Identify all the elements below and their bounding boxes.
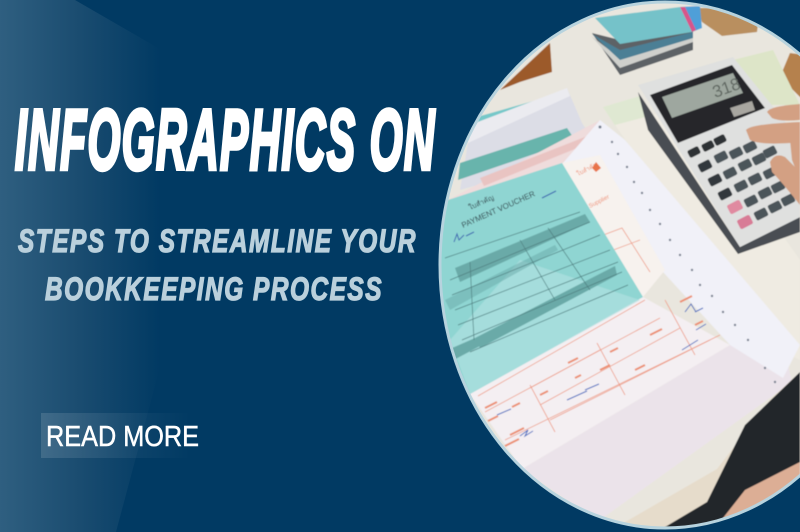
voucher shaded bands	[443, 214, 617, 362]
voucher heading: PAYMENT VOUCHER	[460, 189, 537, 230]
solar cell	[730, 101, 755, 117]
beige table piece	[626, 387, 784, 526]
subtitle line 2: BOOKKEEPING PROCESS	[45, 271, 383, 307]
form top labels	[576, 164, 609, 208]
form red labels	[485, 296, 703, 446]
voucher heading: ใบสำคัญ	[467, 193, 495, 212]
notebook page under papers	[616, 119, 640, 127]
pink-white form	[470, 297, 730, 468]
form handwriting	[497, 304, 706, 436]
button background	[41, 413, 191, 458]
teal sheet two	[458, 128, 575, 180]
grey sheet	[460, 96, 584, 190]
teal voucher	[442, 162, 644, 394]
voucher handwriting	[454, 232, 474, 242]
form red lines	[478, 228, 720, 440]
calculator body	[638, 57, 800, 247]
lavender paper pile	[522, 345, 792, 520]
screen	[662, 73, 743, 118]
button label: READ MORE	[46, 421, 199, 453]
hand on calculator	[746, 104, 800, 205]
keys	[687, 134, 796, 230]
pale green mats	[733, 50, 800, 105]
left gradient shape	[0, 0, 178, 532]
form perforations	[598, 126, 776, 383]
pink sheet	[456, 122, 596, 196]
photo border	[440, 2, 800, 528]
teal strip	[478, 102, 530, 122]
stack of notebooks	[591, 6, 702, 75]
red form logo	[592, 162, 601, 172]
subtitle line 1: STEPS TO STREAMLINE YOUR	[18, 223, 417, 259]
voucher table lines	[445, 212, 628, 352]
screen digits: 318	[710, 74, 743, 102]
calculator shadow edge	[638, 92, 800, 254]
display bezel	[650, 65, 765, 143]
form top labels: ใบสำคัญ	[575, 160, 599, 178]
form top labels: Supplier	[588, 194, 611, 210]
read more button	[41, 413, 199, 458]
subtitle	[18, 223, 417, 307]
wooden objects	[500, 8, 800, 102]
calculator	[638, 57, 800, 254]
desk surface	[430, 0, 800, 532]
photo: desk with calculator and invoices	[430, 0, 800, 532]
dotted continuous-form strip	[563, 120, 800, 378]
skin arm	[722, 462, 800, 518]
dark clothing	[660, 372, 800, 532]
